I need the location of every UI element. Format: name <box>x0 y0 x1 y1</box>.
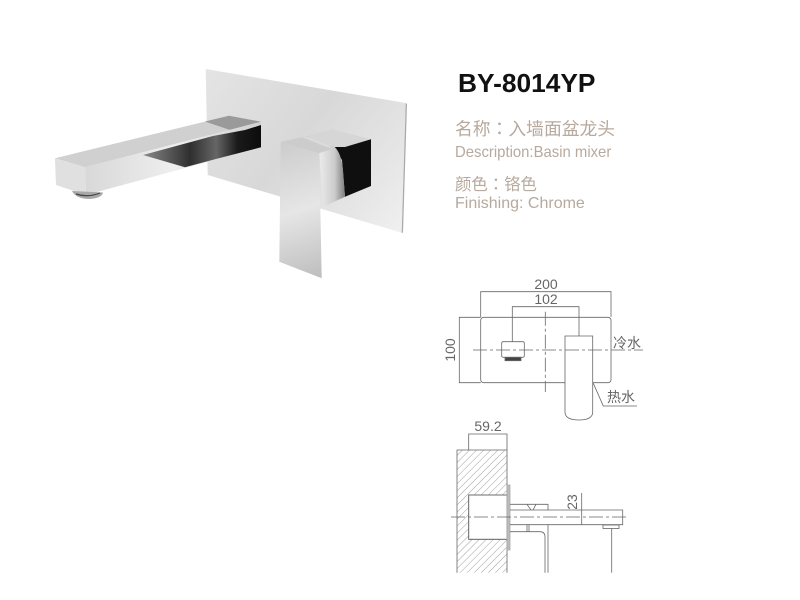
colour in Chinese: 颜色：铬色 <box>455 171 537 195</box>
drawing: top view <box>459 292 643 420</box>
handle <box>279 129 371 278</box>
dimension labels: 冷水 <box>613 335 641 351</box>
spout <box>55 116 261 199</box>
dimension labels: 热水 <box>607 389 635 405</box>
dimension labels: 200 <box>534 276 558 292</box>
name in Chinese: 名称：入墙面盆龙头 <box>455 115 615 141</box>
title: model number: BY-8014YP <box>458 68 595 98</box>
dimension labels: 23 <box>564 494 580 510</box>
drawing: side section <box>451 434 627 573</box>
wall plate <box>206 69 407 233</box>
dimension labels <box>442 276 641 510</box>
dimension labels: 59.2 <box>474 418 502 434</box>
finishing: Finishing: Chrome <box>455 195 585 212</box>
dimension labels: 100 <box>442 338 458 362</box>
description: Description:Basin mixer <box>455 144 611 161</box>
dimension labels: 102 <box>534 291 558 307</box>
